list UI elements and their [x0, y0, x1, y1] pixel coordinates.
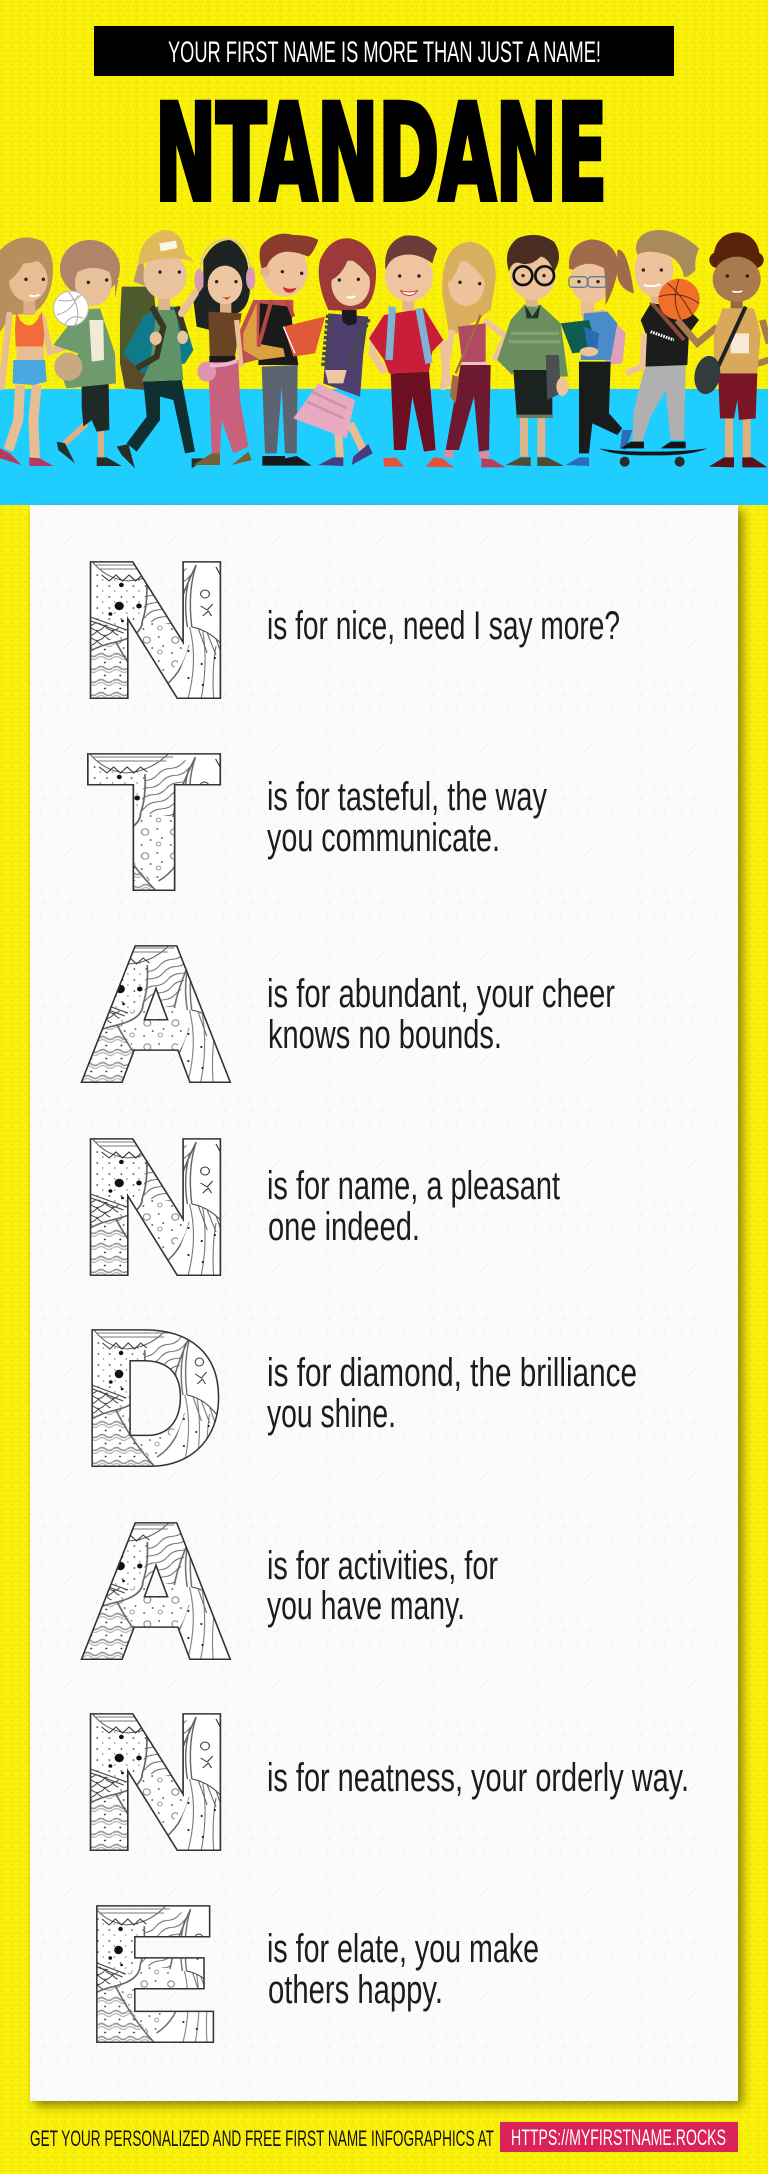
person: boy reading a book — [240, 234, 325, 466]
ornamental letter T: T — [91, 720, 217, 925]
ornamental letter D: D — [85, 1296, 221, 1500]
description text: you shine. — [267, 1392, 396, 1436]
row: E for elate — [90, 1872, 539, 2076]
person: boy with cap and large backpack — [117, 230, 207, 468]
person: girl with ponytail, glasses and tablet — [561, 239, 634, 466]
description text: is for name, a pleasant — [267, 1164, 560, 1208]
row: N for nice — [83, 527, 620, 732]
ornamental letter A: A — [85, 1490, 227, 1693]
ornamental letter A: A — [85, 913, 227, 1116]
row: T for tasteful — [91, 720, 547, 925]
ornamental letter E: E — [90, 1872, 215, 2076]
row: N for neatness — [83, 1679, 689, 1884]
description text — [267, 1544, 498, 1628]
ornamental letter N: N — [83, 1104, 228, 1309]
person: skater boy with basketball — [599, 230, 717, 467]
description text: is for activities, for — [267, 1544, 498, 1588]
description text — [267, 1164, 560, 1249]
person: girl in orange top — [0, 237, 80, 466]
description text: knows no bounds. — [268, 1013, 502, 1057]
ornamental letter N: N — [83, 527, 228, 732]
tagline banner — [94, 26, 674, 76]
description text: is for tasteful, the way — [267, 775, 547, 819]
description text: others happy. — [268, 1968, 443, 2012]
description text: you have many. — [267, 1584, 465, 1628]
ornamental letter T: T — [91, 720, 217, 925]
description text — [267, 775, 547, 860]
person: curly-haired boy in basketball tank — [691, 232, 768, 467]
description text: is for abundant, your cheer — [267, 972, 615, 1016]
person: blonde girl with crossbody bag — [442, 242, 506, 467]
description text — [267, 972, 615, 1057]
person: girl with headphones — [182, 239, 255, 465]
row: A for abundant — [85, 913, 615, 1116]
row: D for diamond — [85, 1296, 637, 1500]
person: girl in green jacket with volleyball — [53, 240, 122, 466]
description text: is for elate, you make — [267, 1927, 539, 1971]
ornamental letter N: N — [83, 1679, 228, 1884]
row: N for name — [83, 1104, 560, 1309]
ornamental letter A: A — [85, 1490, 227, 1693]
ornamental letter A: A — [85, 913, 227, 1116]
description text — [267, 1351, 637, 1436]
ornamental letter N: N — [83, 1679, 228, 1884]
description text: you communicate. — [267, 816, 500, 860]
white content panel — [30, 505, 738, 2101]
description text: is for diamond, the brilliance — [267, 1351, 637, 1395]
row: A for activities — [85, 1490, 498, 1693]
description text — [267, 1927, 539, 2012]
description text: is for nice, need I say more? — [267, 604, 620, 648]
ornamental letter D: D — [85, 1296, 221, 1500]
person: boy with glasses in green sweater — [497, 235, 568, 466]
person: girl with red hair and pink case — [293, 238, 376, 466]
illustration: group of twelve students — [0, 230, 768, 468]
ornamental letter E: E — [90, 1872, 215, 2076]
person: boy in red shirt with blue backpack straps — [369, 235, 454, 467]
ornamental letter N: N — [83, 1104, 228, 1309]
blue floor band — [0, 389, 768, 505]
ornamental letter N: N — [83, 527, 228, 732]
description text: one indeed. — [268, 1205, 420, 1249]
